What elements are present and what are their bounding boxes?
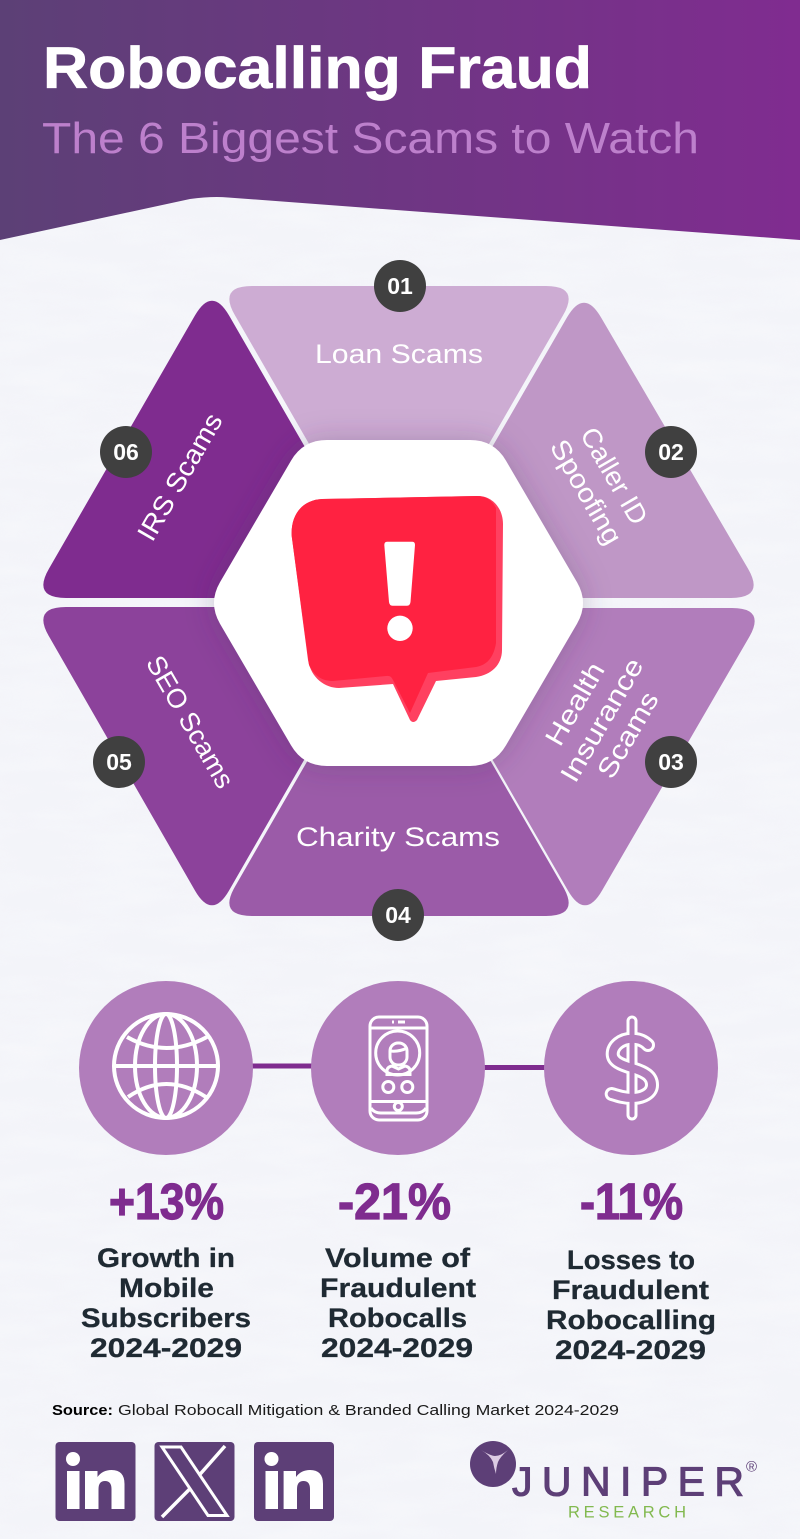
stat: fraudulent robocall volume: Fraudulent — [320, 1273, 476, 1303]
segment 02: caller ID spoofing: Spoofing — [544, 434, 628, 550]
source line: Source: — [52, 1402, 113, 1419]
icon: globe — [79, 981, 253, 1155]
badge 03 — [645, 736, 697, 788]
badge 04: 04 — [385, 902, 411, 928]
Juniper Research logo — [470, 1441, 757, 1521]
stat: mobile subscribers: +13% — [109, 1173, 224, 1230]
badge 06 — [100, 426, 152, 478]
stat: mobile subscribers: Subscribers — [81, 1303, 251, 1333]
stat: robocalling losses: 2024-2029 — [555, 1335, 706, 1365]
badge 05 — [93, 736, 145, 788]
icon: LinkedIn — [56, 1442, 136, 1521]
segment 02: caller ID spoofing: Caller ID — [574, 422, 654, 530]
title: Robocalling Fraud — [43, 36, 592, 101]
source line: Global Robocall Mitigation & Branded Calling Market 2024-2029 — [118, 1402, 619, 1419]
icon: dollar sign — [544, 981, 718, 1155]
stat: mobile subscribers: Growth in — [97, 1243, 235, 1273]
stat: mobile subscribers: Mobile — [119, 1273, 214, 1303]
stat: robocalling losses: Losses to — [567, 1245, 695, 1275]
header banner — [0, 0, 800, 240]
stat: fraudulent robocall volume: Volume of — [325, 1243, 471, 1273]
badge 01 — [374, 260, 426, 312]
segment 01: loan scams: Loan Scams — [315, 339, 483, 369]
stat: robocalling losses: -11% — [580, 1173, 683, 1230]
Juniper Research logo: JUNIPER — [512, 1459, 744, 1505]
stat: fraudulent robocall volume: Robocalls — [328, 1303, 467, 1333]
stat: mobile subscribers: 2024-2029 — [90, 1333, 242, 1363]
stat: fraudulent robocall volume: 2024-2029 — [321, 1333, 473, 1363]
segment 06: IRS scams: IRS Scams — [132, 408, 228, 546]
hexagon diagram — [43, 260, 755, 941]
centre hexagon — [214, 440, 583, 766]
segment 05: SEO scams — [43, 607, 392, 905]
phone speaker — [392, 1020, 405, 1024]
segment 05: SEO scams: SEO Scams — [140, 650, 240, 794]
segment 02: caller ID spoofing — [405, 303, 754, 598]
Juniper Research logo: ® — [746, 1458, 757, 1476]
stat: robocalling losses: Fraudulent — [552, 1275, 709, 1305]
segment 03: health insurance scams — [405, 608, 755, 905]
icon: X — [154, 1442, 234, 1521]
stat: fraudulent robocall volume: -21% — [338, 1173, 451, 1230]
segment 03: health insurance scams: Health — [539, 657, 611, 751]
badge 03: 03 — [658, 749, 684, 775]
badge 04 — [372, 889, 424, 941]
badge 02: 02 — [658, 439, 684, 465]
segment 01: loan scams — [229, 286, 569, 600]
stat: robocalling losses: Robocalling — [546, 1305, 716, 1335]
icon: red alert speech bubble — [292, 496, 503, 722]
segment 06: IRS scams — [43, 301, 392, 598]
icon: smartphone caller — [311, 981, 485, 1155]
badge 05: 05 — [106, 749, 132, 775]
subtitle: The 6 Biggest Scams to Watch — [42, 114, 699, 163]
badge 02 — [645, 426, 697, 478]
icon: LinkedIn — [254, 1442, 334, 1521]
stat: mobile subscribers — [81, 1173, 251, 1363]
segment 03: health insurance scams: Scams — [591, 686, 665, 784]
segment 03: health insurance scams: Insurance — [555, 653, 649, 787]
stat: fraudulent robocall volume — [320, 1173, 476, 1363]
badge 06: 06 — [113, 439, 139, 465]
stat: robocalling losses — [546, 1173, 716, 1365]
segment 04: charity scams: Charity Scams — [296, 822, 500, 852]
segment 04: charity scams — [229, 602, 569, 916]
Juniper Research logo: RESEARCH — [568, 1503, 686, 1521]
stats icon row — [79, 981, 718, 1155]
badge 01: 01 — [387, 273, 413, 299]
